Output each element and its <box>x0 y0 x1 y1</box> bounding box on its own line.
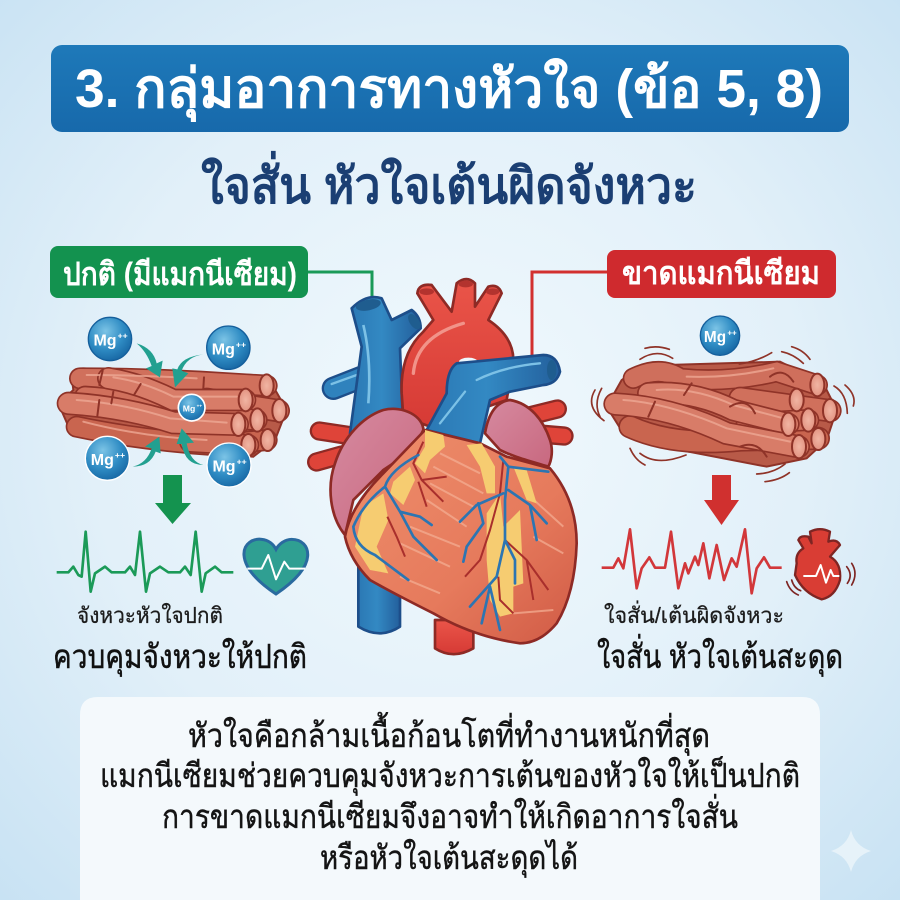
teal arrows <box>133 343 203 467</box>
magnesium ions: Mg <box>212 341 235 358</box>
fat deposits <box>355 430 537 617</box>
caption: palpitations: ใจสั่น หัวใจเต้นสะดุด <box>597 634 843 677</box>
magnesium ions: ++ <box>118 331 128 341</box>
explanation text: หัวใจคือกล้ามเนื้อก้อนโตที่ทำงานหนักที่สุด <box>188 712 710 756</box>
arrow: red down <box>704 475 739 525</box>
magnesium ions: Mg <box>93 332 117 349</box>
explanation text <box>100 712 800 878</box>
arrow: green down <box>155 475 191 524</box>
magnesium ions: Mg <box>183 403 195 413</box>
caption: controls rhythm: ควบคุมจังหวะให้ปกติ <box>53 638 307 677</box>
icon: small shaking red heart <box>787 529 855 599</box>
left pulmonary branches <box>317 431 350 462</box>
single magnesium ion: ++ <box>727 328 737 337</box>
label: normal with magnesium: ปกติ (มีแมกนีเซียม) <box>63 256 297 292</box>
magnesium ions: ++ <box>237 457 247 467</box>
label: magnesium deficiency <box>607 250 836 298</box>
left atrium <box>485 400 552 467</box>
muscle striations <box>400 453 563 613</box>
vibration marks <box>592 347 854 482</box>
blue side branch <box>332 375 363 388</box>
magnesium ions: ++ <box>197 403 202 408</box>
panel: explanation <box>80 697 820 900</box>
right pulmonary branches <box>527 409 564 436</box>
label: irregular rhythm: ใจสั่น/เต้นผิดจังหวะ <box>604 600 784 628</box>
title text: 3. กลุ่มอาการทางหัวใจ (ข้อ 5, 8) <box>75 57 823 123</box>
explanation text: แมกนีเซียมช่วยควบคุมจังหวะการเต้นของหัวใจให้เป็นปกติ <box>100 756 800 796</box>
magnesium ions: Mg <box>212 459 236 476</box>
title banner <box>51 45 849 132</box>
muscle bundle <box>58 368 287 457</box>
panel: deficient muscle fibres <box>592 316 854 482</box>
descending aorta stub <box>435 620 473 654</box>
ventricles <box>345 430 577 643</box>
label: normal rhythm: จังหวะหัวใจปกติ <box>77 603 223 628</box>
explanation text: การขาดแมกนีเซียมจึงอาจทำให้เกิดอาการใจสั่น <box>162 794 738 835</box>
magnesium ions <box>85 317 251 487</box>
coronary veins: blue <box>353 455 548 630</box>
icon: teal heart with pulse <box>244 539 308 594</box>
connector: deficiency label to heart <box>532 272 607 356</box>
icon: sparkle <box>831 830 871 872</box>
single magnesium ion <box>700 316 740 355</box>
connector: normal label to heart <box>308 272 372 296</box>
panel: normal muscle fibres with magnesium <box>58 317 287 487</box>
magnesium ions: ++ <box>236 339 246 349</box>
explanation text: หรือหัวใจเต้นสะดุดได้ <box>320 839 578 878</box>
lower vena cava <box>358 560 400 633</box>
distorted muscle bundle <box>607 362 837 467</box>
subtitle: ใจสั่น หัวใจเต้นผิดจังหวะ <box>201 151 697 214</box>
superior vena cava <box>350 297 421 433</box>
ECG: normal rhythm <box>57 532 233 592</box>
magnesium ions: Mg <box>91 452 114 469</box>
label: magnesium deficiency: ขาดแมกนีเซียม <box>622 255 820 291</box>
anatomical heart <box>317 279 577 654</box>
right atrium <box>331 409 423 535</box>
coronary arteries: red <box>387 442 548 613</box>
single magnesium ion: Mg <box>704 329 726 346</box>
label: normal with magnesium <box>50 246 308 298</box>
ECG: irregular rhythm <box>602 529 782 593</box>
magnesium ions: ++ <box>115 450 125 460</box>
aortic arch <box>402 279 513 427</box>
pulmonary artery <box>427 355 560 443</box>
